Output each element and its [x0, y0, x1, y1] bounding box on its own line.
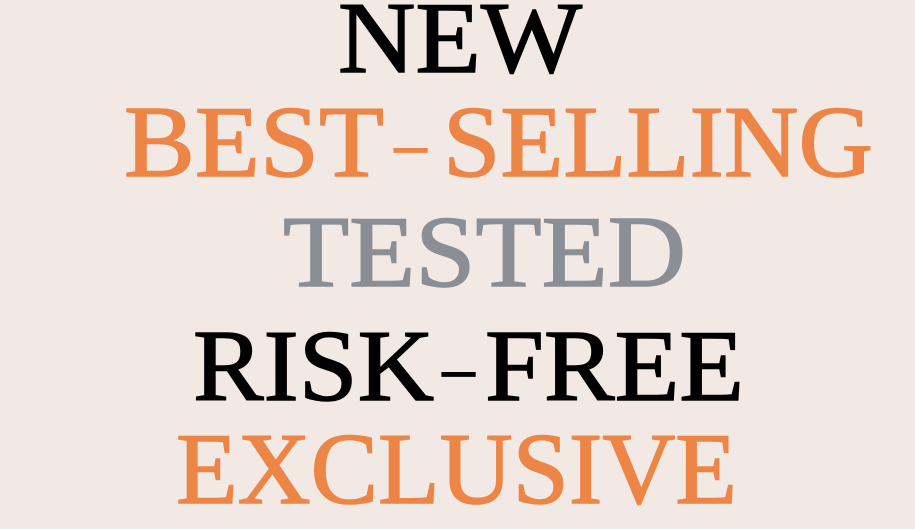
word: BEST-SELLING: BEST: [124, 86, 384, 199]
word: BEST-SELLING: -: [388, 108, 432, 181]
word: BEST-SELLING: SELLING: [443, 86, 873, 199]
word: RISK-FREE: [193, 310, 744, 423]
word: RISK-FREE: RISK: [193, 310, 434, 423]
word: EXCLUSIVE: EXCLUSIVE: [176, 413, 737, 526]
word: RISK-FREE: -: [436, 332, 480, 405]
word: TESTED: TESTED: [283, 196, 686, 309]
word: BEST-SELLING: [124, 86, 873, 199]
word: RISK-FREE: FREE: [485, 310, 744, 423]
